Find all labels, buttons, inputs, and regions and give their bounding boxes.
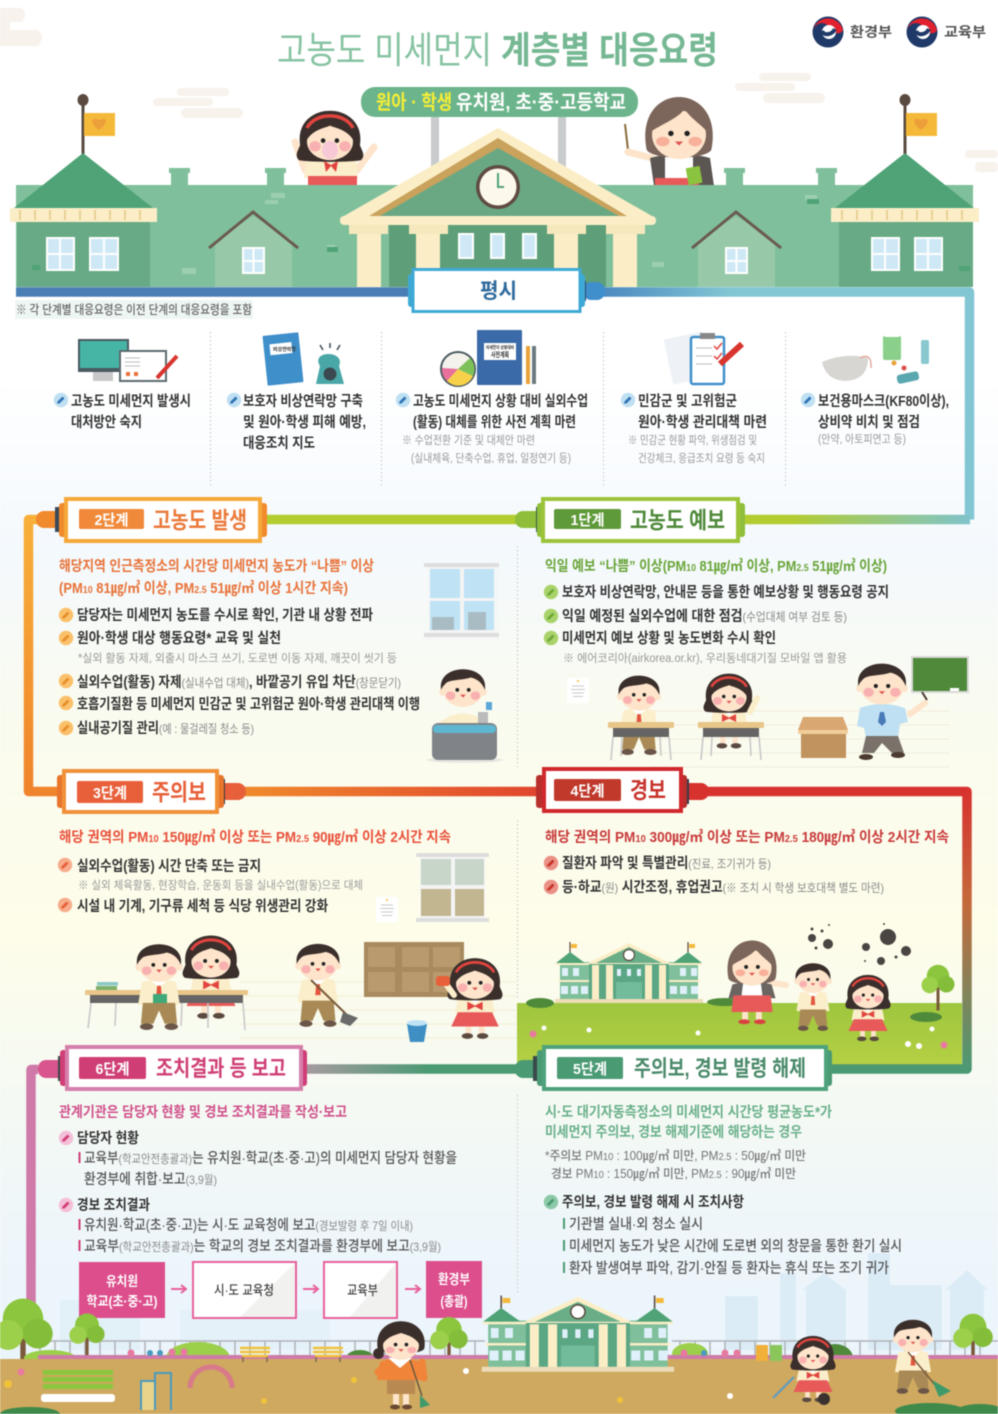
title bbox=[277, 30, 718, 71]
stage box: 평시 bbox=[408, 270, 605, 312]
bricks bbox=[182, 193, 817, 274]
note: cumulative response bbox=[15, 300, 253, 319]
bullet items: *실외 활동 자제, 외출시 마스크 쓰기, 도로변 이동 자제, 깨끗이 씻기 등 bbox=[78, 651, 397, 665]
arrow bbox=[171, 1285, 186, 1293]
arrow bbox=[405, 1285, 420, 1293]
condition heading: 해당 권역의 PM10 300㎍/㎥ 이상 또는 PM2.5 180㎍/㎥ 이상 2시간 지속 bbox=[545, 828, 949, 847]
bullet items: 담당자는 미세먼지 농도를 수시로 확인, 기관 내 상황 전파 bbox=[77, 607, 374, 624]
trees bbox=[0, 1299, 993, 1381]
bullet items: 보호자 비상연락망, 안내문 등을 통한 예보상황 및 행동요령 공지 bbox=[562, 584, 889, 601]
text bbox=[818, 393, 949, 446]
climbing frame bbox=[141, 1373, 171, 1410]
illustration: dusty window bbox=[416, 853, 489, 922]
icon: mask and medicine bbox=[822, 331, 929, 384]
chimneys bbox=[169, 168, 837, 186]
text: (실내체육, 단축수업, 휴업, 일정연기 등) bbox=[411, 451, 571, 465]
logo: 교육부 bbox=[906, 16, 986, 48]
text: 대처방안 숙지 bbox=[71, 414, 142, 431]
title: 계층별 대응요령 bbox=[501, 30, 718, 71]
condition heading: 해당 권역의 PM10 150㎍/㎥ 이상 또는 PM2.5 90㎍/㎥ 이상 2시간 지속 bbox=[59, 828, 451, 847]
stage box: step 6: 6단계 bbox=[96, 1061, 130, 1078]
bullet items: 호흡기질환 등 미세먼지 민감군 및 고위험군 원아·학생 관리대책 이행 bbox=[77, 696, 420, 713]
arch bbox=[190, 1367, 232, 1388]
bullet items: 익일 예정된 실외수업에 대한 점검(수업대체 여부 검토 등) bbox=[562, 608, 847, 625]
benches bbox=[240, 1348, 343, 1362]
central portico bbox=[340, 128, 656, 287]
release thresholds bbox=[545, 1149, 806, 1181]
panel: step 2 content bbox=[59, 558, 503, 763]
illustration: classroom bbox=[567, 657, 968, 767]
stage box: step 1: 고농도 예보 bbox=[630, 507, 725, 533]
panel: normal column 5 bbox=[801, 331, 949, 446]
pipe: normal stage to step 1 bbox=[16, 292, 970, 520]
condition heading: 시·도 대기자동측정소의 미세먼지 시간당 평균농도*가 bbox=[545, 1104, 832, 1121]
flowers bbox=[4, 1348, 740, 1404]
release thresholds: 경보 PM10 : 150㎍/㎥ 미만, PM2.5 : 90㎍/㎥ 미만 bbox=[551, 1167, 796, 1181]
stage box: 평시: 평시 bbox=[480, 280, 517, 303]
recycling bins bbox=[756, 1345, 782, 1361]
flow box: kindergarten and school: 유치원 bbox=[106, 1274, 138, 1289]
panel: step 1 content bbox=[544, 557, 968, 767]
school sign poles bbox=[431, 115, 566, 175]
panel: normal column 3 bbox=[396, 330, 588, 465]
illustration: trees and shrubs behind ground bbox=[0, 1299, 993, 1381]
character: teacher with pointer bbox=[625, 97, 714, 186]
stage box: step 4: 4단계 bbox=[570, 783, 604, 800]
stage box: step 2: 2단계 bbox=[94, 512, 128, 529]
bullet items: 주의보, 경보 발령 해제 시 조치사항 bbox=[562, 1194, 744, 1211]
ministry logos bbox=[812, 16, 986, 48]
flow box: environment ministry bbox=[426, 1261, 482, 1318]
flow box: kindergarten and school bbox=[79, 1262, 165, 1318]
icon: gauge, plan book and pencils bbox=[441, 330, 536, 386]
stage box: step 6 bbox=[38, 1047, 307, 1089]
text: ※ 수업전환 기준 및 대체안 마련 bbox=[402, 434, 535, 447]
bullet items bbox=[59, 607, 420, 737]
condition heading: (PM10 81㎍/㎥ 이상, PM2.5 51㎍/㎥ 이상 1시간 지속) bbox=[59, 579, 348, 598]
bullet items: 실외수업(활동) 시간 단축 또는 금지 bbox=[77, 858, 261, 875]
panel: step 6 content bbox=[59, 1104, 482, 1318]
illustration: lockers bbox=[364, 942, 464, 997]
illustration: flowers bbox=[530, 1026, 948, 1049]
panel: step 4 content bbox=[526, 828, 954, 1049]
illustration: classroom wall bricks bbox=[240, 982, 516, 1038]
illustration: girl cleaning bbox=[436, 958, 503, 1039]
stage box: step 1: 1단계 bbox=[570, 512, 604, 529]
bullet items: 시설 내 기계, 기구류 세척 등 식당 위생관리 강화 bbox=[77, 898, 328, 915]
item: staff status: 환경부에 취합·보고(3,9월) bbox=[84, 1171, 217, 1188]
flow box: provincial education office: 시·도 교육청 bbox=[214, 1283, 274, 1298]
bullet items bbox=[544, 1194, 902, 1277]
stage box: step 2: 고농도 발생 bbox=[153, 507, 247, 533]
text: (안약, 아토피연고 등) bbox=[818, 432, 906, 446]
stage box: step 1 bbox=[515, 499, 745, 541]
condition heading bbox=[59, 558, 374, 598]
stage box: step 4: 경보 bbox=[630, 777, 666, 803]
bullet items: 원아·학생 대상 행동요령* 교육 및 실천 bbox=[77, 630, 281, 647]
shrubs bbox=[24, 1342, 853, 1374]
stage box: step 5: 5단계 bbox=[573, 1061, 607, 1078]
stage box: step 5: 주의보, 경보 발령 해제 bbox=[634, 1056, 806, 1081]
illustration: school building bbox=[10, 94, 979, 287]
dormers bbox=[209, 212, 781, 287]
illustration: ground bbox=[0, 1355, 998, 1414]
subtitle sign bbox=[361, 87, 638, 117]
illustration: playground and scenery bbox=[0, 1345, 998, 1414]
release thresholds: *주의보 PM10 : 100㎍/㎥ 미만, PM2.5 : 50㎍/㎥ 미만 bbox=[545, 1149, 806, 1163]
pipes: step 2, 3, 4, 5, 6 bbox=[28, 520, 967, 1330]
character: woman sweeping bbox=[373, 1321, 430, 1410]
condition heading bbox=[545, 1104, 832, 1141]
illustration: teacher guiding students bbox=[727, 940, 786, 1024]
stage box: step 4 bbox=[536, 769, 709, 811]
student girl at desk bbox=[698, 674, 764, 760]
item: staff status: 담당자 현황 bbox=[77, 1130, 139, 1147]
icon: gauge, plan book and pencils: 사전계획 bbox=[491, 350, 509, 359]
student boy at desk bbox=[608, 675, 674, 760]
text: (활동) 대체를 위한 사전 계획 마련 bbox=[413, 414, 576, 431]
bullet items bbox=[544, 855, 884, 896]
condition heading: 익일 예보 “나쁨” 이상(PM10 81㎍/㎥ 이상, PM2.5 51㎍/㎥ 이상) bbox=[545, 557, 887, 576]
stage box: step 6: 조치결과 등 보고 bbox=[156, 1056, 286, 1081]
left tower bbox=[10, 94, 157, 287]
item: alert results bbox=[59, 1197, 441, 1255]
logo: 교육부: 교육부 bbox=[944, 24, 986, 40]
bullet items: 미세먼지 예보 상황 및 농도변화 수시 확인 bbox=[562, 630, 776, 647]
character: boy with broom bbox=[892, 1320, 951, 1397]
bullet bbox=[396, 393, 410, 407]
bullet items: 실내공기질 관리(예 : 물걸레질 청소 등) bbox=[77, 720, 254, 737]
bullet items: 환자 발생여부 파악, 감기·안질 등 환자는 휴식 또는 조기 귀가 bbox=[569, 1260, 889, 1277]
stage box: step 3 bbox=[57, 771, 246, 812]
text bbox=[243, 393, 366, 452]
stage box: step 5 bbox=[515, 1047, 832, 1089]
illustration: field bushes bbox=[526, 998, 942, 1022]
flow box: education ministry: 교육부 bbox=[347, 1283, 378, 1298]
bullet bbox=[54, 393, 68, 407]
garden bed bbox=[41, 1370, 115, 1402]
text bbox=[628, 393, 767, 465]
text: 고농도 미세먼지 발생시 bbox=[71, 393, 191, 410]
text bbox=[402, 393, 588, 465]
bullet items: 질환자 파악 및 특별관리(진료, 조기귀가 등) bbox=[562, 855, 771, 872]
character: girl waving bbox=[295, 111, 374, 186]
flow box: kindergarten and school: 학교(초·중·고) bbox=[86, 1294, 158, 1309]
teacher bbox=[856, 663, 927, 760]
item: alert results: 경보 조치결과 bbox=[77, 1197, 150, 1214]
bullet items: 미세먼지 농도가 낮은 시간에 도로변 외의 창문을 통한 환기 실시 bbox=[569, 1238, 902, 1255]
text bbox=[71, 393, 191, 431]
right tower bbox=[831, 94, 979, 287]
text: 보건용마스크(KF80이상), bbox=[818, 393, 949, 410]
text: 원아·학생 관리대책 마련 bbox=[638, 414, 767, 431]
flow chart: reporting line bbox=[79, 1261, 482, 1318]
illustration: fine dust particles bbox=[808, 923, 911, 965]
subtitle sign: 유치원, 초·중·고등학교 bbox=[456, 91, 626, 114]
bullet items bbox=[58, 858, 363, 915]
stage box: step 3: 주의보 bbox=[152, 779, 206, 805]
teacher desk bbox=[798, 717, 848, 758]
bullet items bbox=[544, 584, 889, 665]
panel: step 5 content bbox=[544, 1104, 902, 1277]
illustration: bucket bbox=[407, 1020, 427, 1042]
condition heading: 관계기관은 담당자 현황 및 경보 조치결과를 작성·보고 bbox=[59, 1104, 347, 1121]
icon: gauge, plan book and pencils: 미세먼지 상황대비 bbox=[486, 344, 514, 351]
condition heading: 미세먼지 주의보, 경보 해제기준에 해당하는 경우 bbox=[545, 1124, 802, 1141]
panel: normal-time column dividers bbox=[210, 332, 786, 486]
bullet bbox=[621, 393, 635, 407]
illustration: boy with mask bbox=[794, 963, 832, 1031]
flow box: provincial education office bbox=[193, 1262, 296, 1318]
condition heading: 해당지역 인근측정소의 시간당 미세먼지 농도가 “나쁨” 이상 bbox=[59, 558, 374, 575]
bullet items: 기관별 실내·외 청소 실시 bbox=[569, 1216, 703, 1233]
illustration: note bbox=[376, 897, 398, 922]
icon: clipboard and pen bbox=[664, 331, 742, 385]
text: 대응조치 지도 bbox=[243, 435, 315, 452]
clock bbox=[476, 165, 520, 209]
center dotted divider bbox=[516, 546, 518, 1295]
blackboard bbox=[912, 657, 968, 692]
bullet bbox=[227, 393, 241, 407]
arrow bbox=[303, 1285, 318, 1293]
note: cumulative response: ※ 각 단계별 대응요령은 이전 단계의 대응요령을 포함 bbox=[16, 302, 252, 317]
text: ※ 민감군 현황 파악, 위생점검 및 bbox=[628, 434, 757, 447]
icon: contact book and phone: 비상연락망 bbox=[273, 346, 296, 353]
illustration: bottom school bbox=[482, 1296, 674, 1372]
panel: normal column 1 bbox=[54, 339, 191, 431]
illustration: window with city bbox=[424, 563, 499, 640]
bullet items: 등·하교(원) 시간조정, 휴업권고(※ 조치 시 학생 보호대책 별도 마련) bbox=[562, 879, 884, 896]
icon: monitor and tablet bbox=[78, 339, 177, 382]
flow box: education ministry bbox=[324, 1262, 397, 1318]
item: alert results: 교육부(학교안전총괄과)는 학교의 경보 조치결과를 환경부에 보고(3,9월) bbox=[84, 1238, 441, 1255]
bottom bushes bbox=[0, 1403, 998, 1414]
illustration: girl with mask bbox=[845, 975, 891, 1041]
illustration: field tree bbox=[922, 965, 954, 1010]
text: 보호자 비상연락망 구축 bbox=[243, 393, 363, 410]
item: alert results: 유치원·학교(초·중·고)는 시·도 교육청에 보고(경보발령 후 7일 이내) bbox=[84, 1217, 413, 1234]
bullet items: 실외수업(활동) 자제(실내수업 대체), 바깥공기 유입 차단(창문닫기) bbox=[77, 674, 401, 691]
panel: normal column 4 bbox=[621, 331, 767, 465]
text: 민감군 및 고위험군 bbox=[638, 393, 737, 410]
stage box: step 2 bbox=[36, 499, 267, 541]
bullet bbox=[801, 393, 815, 407]
illustration: mini school bbox=[555, 942, 703, 1003]
illustration: boy gargling at sink bbox=[427, 669, 503, 763]
text: 및 원아·학생 피해 예방, bbox=[243, 414, 366, 431]
bullet items: ※ 실외 체육활동, 현장학습, 운동회 등을 실내수업(활동)으로 대체 bbox=[78, 878, 363, 892]
decorative clouds bbox=[0, 8, 998, 172]
text: 상비약 비치 및 점검 bbox=[818, 414, 920, 431]
illustration: students at desks bbox=[85, 935, 248, 1030]
illustration: boy sweeping bbox=[295, 944, 358, 1027]
logo: 환경부: 환경부 bbox=[850, 24, 892, 40]
panel: step 3 content bbox=[58, 828, 516, 1042]
green field stage 4 bbox=[517, 1003, 962, 1065]
stage box: step 3: 3단계 bbox=[93, 785, 127, 802]
flow box: environment ministry: (총괄) bbox=[440, 1294, 468, 1309]
character: girl with tongs bbox=[773, 1336, 836, 1405]
city skyline bbox=[60, 1253, 988, 1350]
flow box: environment ministry: 환경부 bbox=[438, 1272, 470, 1287]
bullet items: ※ 에어코리아(airkorea.or.kr), 우리동네대기질 모바일 앱 활용 bbox=[563, 651, 847, 665]
panel: normal column 2 bbox=[227, 332, 366, 452]
subtitle sign: 원아 · 학생 bbox=[376, 91, 452, 114]
text: 고농도 미세먼지 상황 대비 실외수업 bbox=[413, 393, 588, 410]
item: staff status bbox=[59, 1130, 457, 1188]
school main roof and wall bbox=[16, 185, 973, 287]
title: 고농도 미세먼지 bbox=[277, 30, 492, 71]
illustration: fence bbox=[38, 1341, 998, 1356]
logo: 환경부 bbox=[812, 16, 892, 48]
text: 건강체크, 응급조치 요령 등 숙지 bbox=[638, 452, 765, 465]
item: staff status: 교육부(학교안전총괄과)는 유치원·학교(초·중·고)의 미세먼지 담당자 현황을 bbox=[84, 1150, 457, 1167]
